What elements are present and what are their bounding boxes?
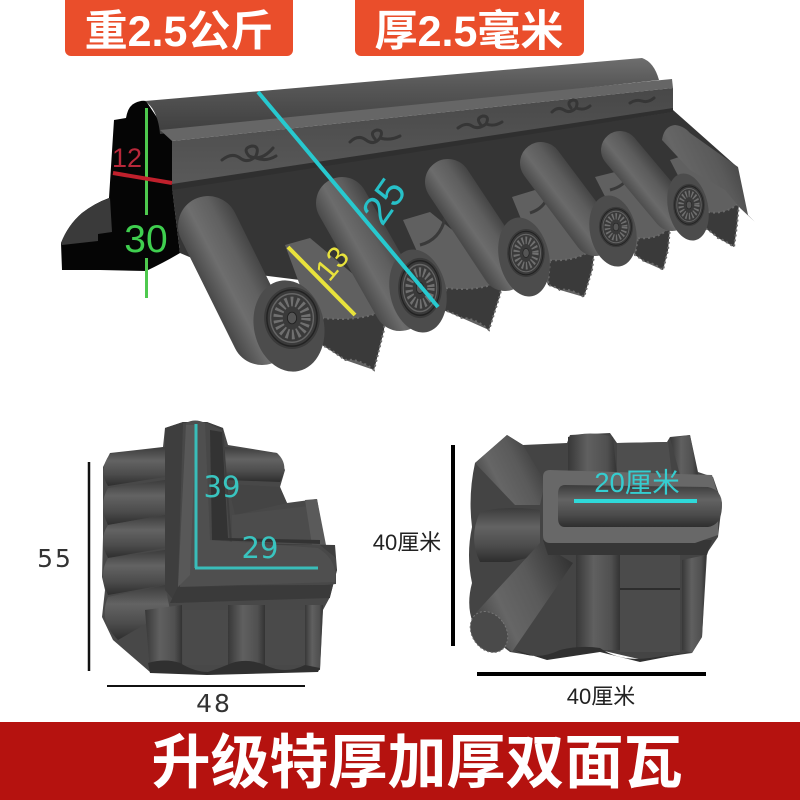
roll tile 5: [620, 150, 672, 212]
corner tile dimension 29: 29: [242, 531, 278, 565]
ridge roll: [145, 58, 659, 134]
L shaped ridge: [165, 422, 337, 603]
ridge roll: [558, 485, 722, 527]
bottom scallops: [148, 660, 320, 675]
left rolls: [474, 508, 540, 562]
eave tiles: [285, 155, 739, 370]
left rolls: [103, 447, 165, 486]
eave steps: [420, 176, 628, 245]
bottom rolls: [145, 605, 182, 672]
upper right rolls: [225, 447, 284, 482]
corner tile height 55: 55: [37, 544, 73, 573]
corner tile dimension 39: 39: [204, 470, 240, 504]
square tile width 40cm: 40厘米: [567, 684, 635, 709]
bottom scallops: [515, 647, 692, 662]
eave ornament bands: [322, 203, 739, 370]
corner tile dimension 29: [195, 531, 318, 568]
dimension: 12: [112, 143, 172, 183]
shadowed underside: [172, 110, 735, 300]
badge: weight: 重2.5公斤: [85, 8, 273, 56]
square tile dimension 20cm: [574, 467, 697, 501]
right end tile: [662, 125, 755, 222]
dimension: 13: 13: [309, 241, 356, 287]
dimension: 13: [288, 241, 356, 315]
square tile: [462, 433, 722, 662]
dimension: 25: 25: [354, 171, 415, 232]
dimension: 25: [258, 92, 438, 307]
corner tile width 48: 48: [196, 689, 232, 718]
lower rolls: [576, 550, 620, 650]
roll tile 1: [208, 226, 262, 335]
square tile dimension 20cm: 20厘米: [594, 467, 680, 498]
badge: thickness: 厚2.5毫米: [375, 8, 563, 56]
square tile height 40cm: 40厘米: [373, 530, 441, 555]
plate: [543, 540, 712, 555]
roll tile 3: [448, 182, 505, 268]
roll tile 2: [342, 203, 400, 305]
flange and wall: [160, 79, 673, 141]
cloud reliefs: [222, 98, 654, 161]
dimension: 12: 12: [112, 143, 142, 173]
corner tile: [102, 420, 337, 675]
main ridge tile: [61, 58, 755, 378]
bottom banner: 升级特厚加厚双面瓦: [151, 730, 683, 796]
upper rolls: [568, 434, 617, 475]
bottom banner: [0, 722, 800, 800]
black end profile: [61, 101, 180, 271]
dimension: height 30: 30: [124, 218, 168, 261]
end disc: [462, 604, 516, 660]
roll tile 4: [541, 163, 595, 235]
